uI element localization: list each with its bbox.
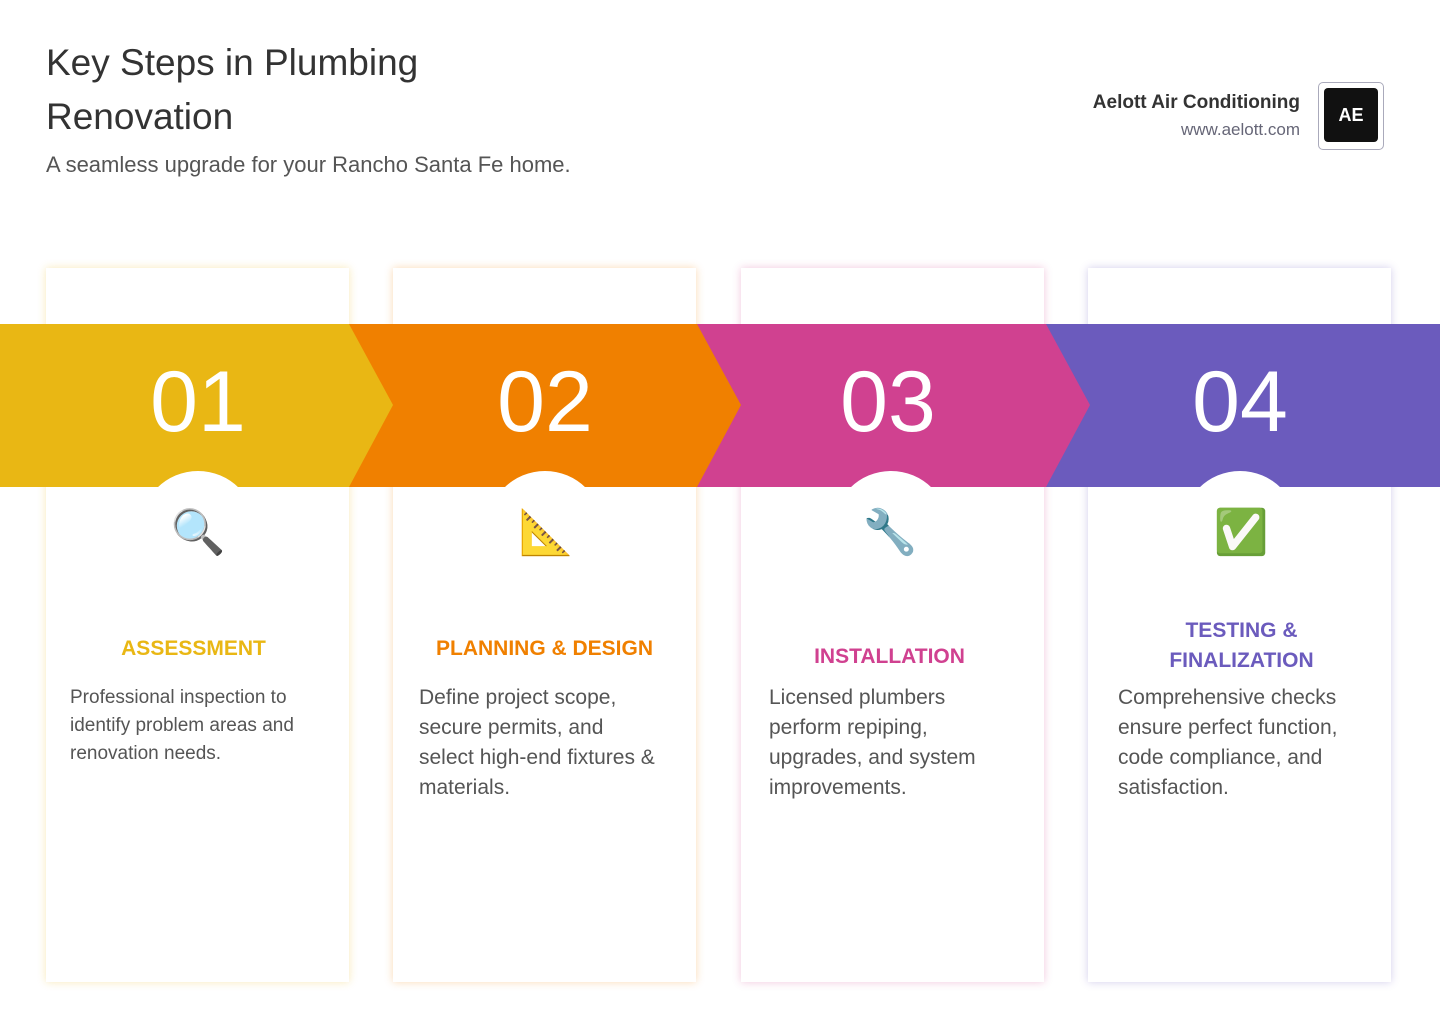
step 1 text: identify problem areas and [70, 715, 294, 736]
step 4 text: FINALIZATION [1169, 649, 1314, 672]
numbers: 01 [150, 354, 246, 450]
banner arrows [0, 324, 1440, 487]
step 4 text: satisfaction. [1118, 776, 1229, 799]
step 2 text: select high-end fixtures & [419, 746, 655, 769]
step 4 text: TESTING & [1185, 619, 1298, 642]
step 2 text: PLANNING & DESIGN [436, 637, 653, 660]
step 3 text: improvements. [769, 776, 907, 799]
circles [140, 471, 256, 587]
title: Key Steps in Plumbing [46, 42, 418, 83]
text: 04 [1192, 354, 1288, 450]
logo [1318, 82, 1384, 150]
text: 02 [497, 354, 593, 450]
text: 03 [840, 354, 936, 450]
subtitle: A seamless upgrade for your Rancho Santa Fe home. [46, 152, 571, 177]
step 3 text [769, 645, 976, 799]
brand url: www.aelott.com [1181, 120, 1300, 139]
card 1 [46, 268, 349, 982]
icon: check: ✅ [1214, 507, 1268, 558]
step 1 text: ASSESSMENT [121, 637, 266, 660]
step 2 text: Define project scope, [419, 686, 616, 709]
step 3 text: INSTALLATION [814, 645, 965, 668]
icon: magnifier: 🔍 [171, 507, 225, 558]
step 2 text [419, 637, 655, 799]
card 4 [1088, 268, 1391, 982]
step 4 text [1118, 619, 1337, 799]
card 3 [741, 268, 1044, 982]
step 4 text: ensure perfect function, [1118, 716, 1337, 739]
title [46, 42, 418, 137]
step 1 text [70, 637, 294, 764]
icon: wrench: 🔧 [863, 507, 917, 558]
title: Renovation [46, 96, 233, 137]
step 3 text: upgrades, and system [769, 746, 976, 769]
step 4 text: code compliance, and [1118, 746, 1322, 769]
brand [1093, 82, 1384, 150]
step 3 text: perform repiping, [769, 716, 928, 739]
step 2 text: secure permits, and [419, 716, 603, 739]
card 2 [393, 268, 696, 982]
icon: triangle ruler: 📐 [519, 507, 573, 558]
step 4 text: Comprehensive checks [1118, 686, 1336, 709]
step 1 text: Professional inspection to [70, 687, 287, 708]
brand name: Aelott Air Conditioning [1093, 92, 1300, 113]
logo: AE [1338, 105, 1364, 125]
step 3 text: Licensed plumbers [769, 686, 945, 709]
step 2 text: materials. [419, 776, 510, 799]
step 1 text: renovation needs. [70, 743, 221, 764]
